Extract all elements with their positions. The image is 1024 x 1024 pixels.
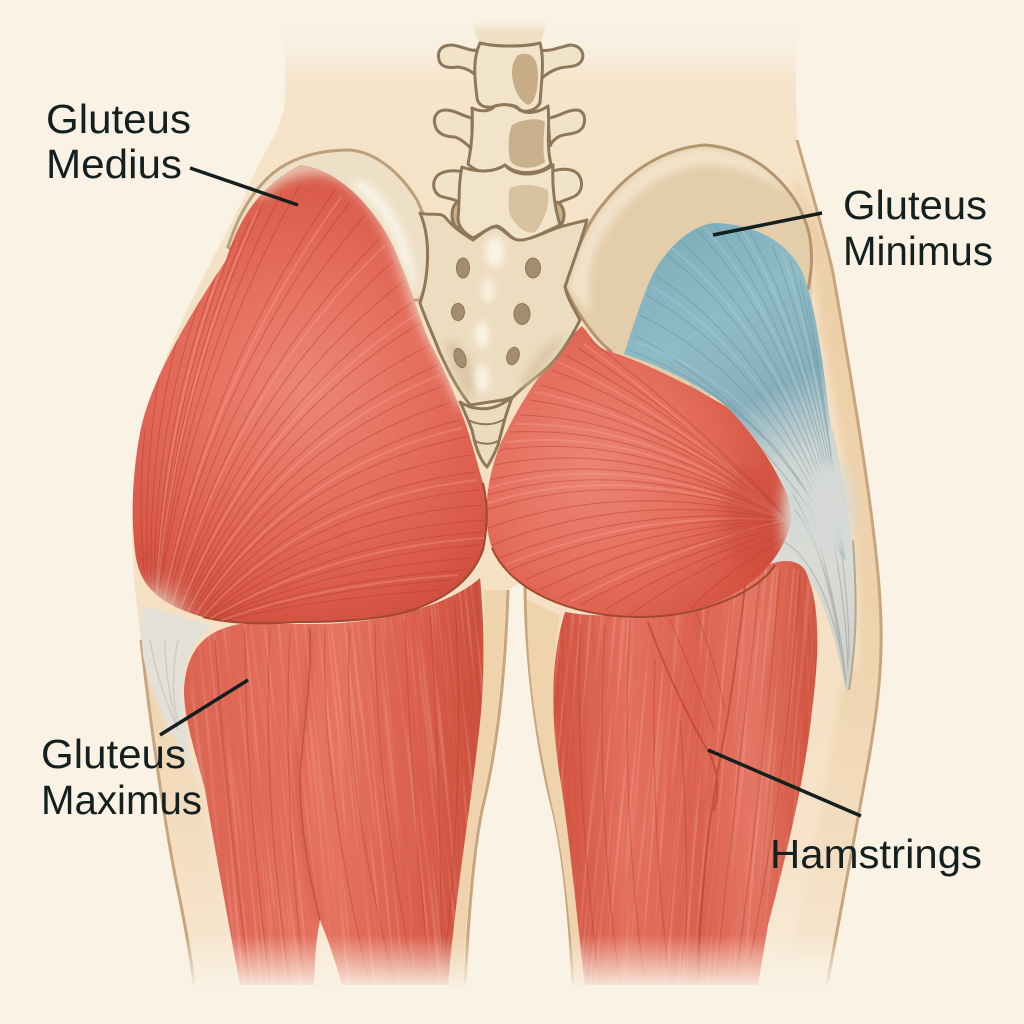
tendon: right iliotibial band xyxy=(772,430,857,694)
sacrum shading xyxy=(445,335,565,400)
left ilium light rim xyxy=(350,180,418,295)
pelvis bones xyxy=(228,145,813,400)
coccyx segments xyxy=(468,418,506,444)
coccyx xyxy=(460,398,512,467)
label: Hamstrings xyxy=(708,750,982,877)
label: Gluteus Maximus: Gluteus xyxy=(41,731,186,777)
right ilium outline xyxy=(565,145,812,352)
vertebra 2 right process xyxy=(548,110,585,146)
vertebra 3 right process xyxy=(550,169,582,208)
sacral foramina xyxy=(452,258,540,369)
muscle: hamstrings right leg xyxy=(553,561,818,985)
top vertebra stump xyxy=(474,22,546,45)
muscle: gluteus right xyxy=(486,326,811,617)
lower-left tendon fade xyxy=(140,570,200,616)
right ilium fill xyxy=(565,145,813,400)
sacrum highlights xyxy=(475,236,504,392)
right gluteus soft tendon edge xyxy=(772,476,790,554)
right ilium light rim xyxy=(568,148,790,312)
left hamstring division xyxy=(298,628,320,920)
top fade over spine stump xyxy=(460,15,560,33)
left gluteus dark fibres xyxy=(141,185,485,622)
spine and sacrum xyxy=(420,22,587,467)
muscle: gluteus minimus (blue) xyxy=(624,223,852,560)
top skin fade xyxy=(270,0,810,75)
vertebra 1 right process xyxy=(540,45,583,80)
leg outlines xyxy=(141,140,881,985)
label: Gluteus Medius: Medius xyxy=(46,141,182,187)
sacrum body xyxy=(420,213,587,405)
vertebra 1 left process xyxy=(438,45,480,80)
tendon fibres xyxy=(780,450,849,685)
left gluteus light fibres xyxy=(155,196,484,622)
muscle: hamstrings left leg xyxy=(184,578,484,985)
label: Gluteus Minimus xyxy=(713,182,993,274)
soft top and medial edge xyxy=(255,166,468,405)
inner skin shading xyxy=(448,590,585,985)
right gluteus light fibres xyxy=(488,344,785,602)
label: Gluteus Medius: Gluteus xyxy=(46,96,191,142)
right gluteus edge darkening at tendon xyxy=(722,471,776,550)
left ilium xyxy=(228,150,430,300)
skin shading strips xyxy=(130,170,900,985)
right hamstring divisions xyxy=(648,585,745,980)
vertebra 3 right articular facet xyxy=(546,202,564,228)
vertebra 3 left articular facet xyxy=(452,202,466,228)
body silhouette xyxy=(130,0,900,990)
vertebra 3 body xyxy=(458,165,560,240)
right gluteus dark fibres xyxy=(486,340,790,615)
blue-to-tendon fade xyxy=(804,460,852,560)
vertebra 2 body xyxy=(468,105,551,173)
label: Gluteus Maximus: Maximus xyxy=(41,777,202,823)
left leg and torso skin xyxy=(132,30,881,990)
blue fibres xyxy=(628,226,845,560)
vertebra 3 left process xyxy=(434,171,465,205)
tendon: lower-left band xyxy=(141,606,212,775)
vertebra 1 shade xyxy=(512,54,538,105)
right hamstring fibres xyxy=(579,570,800,985)
vertebra 2 shade xyxy=(509,119,545,168)
vertebra 2 left process xyxy=(434,110,472,150)
vertebra 1 body xyxy=(475,43,542,111)
left hamstring fibres xyxy=(215,600,458,985)
label: Gluteus Minimus: Gluteus xyxy=(843,182,987,228)
vertebra 3 shade xyxy=(508,185,548,233)
label: Gluteus Minimus: Minimus xyxy=(843,228,993,274)
muscle: gluteus left (large) xyxy=(114,165,487,646)
blue highlights xyxy=(636,228,845,560)
bottom fade xyxy=(130,935,910,1005)
label: Gluteus Medius xyxy=(46,96,298,205)
label: Gluteus Maximus xyxy=(41,680,248,823)
label: Hamstrings: Hamstrings xyxy=(770,831,982,877)
